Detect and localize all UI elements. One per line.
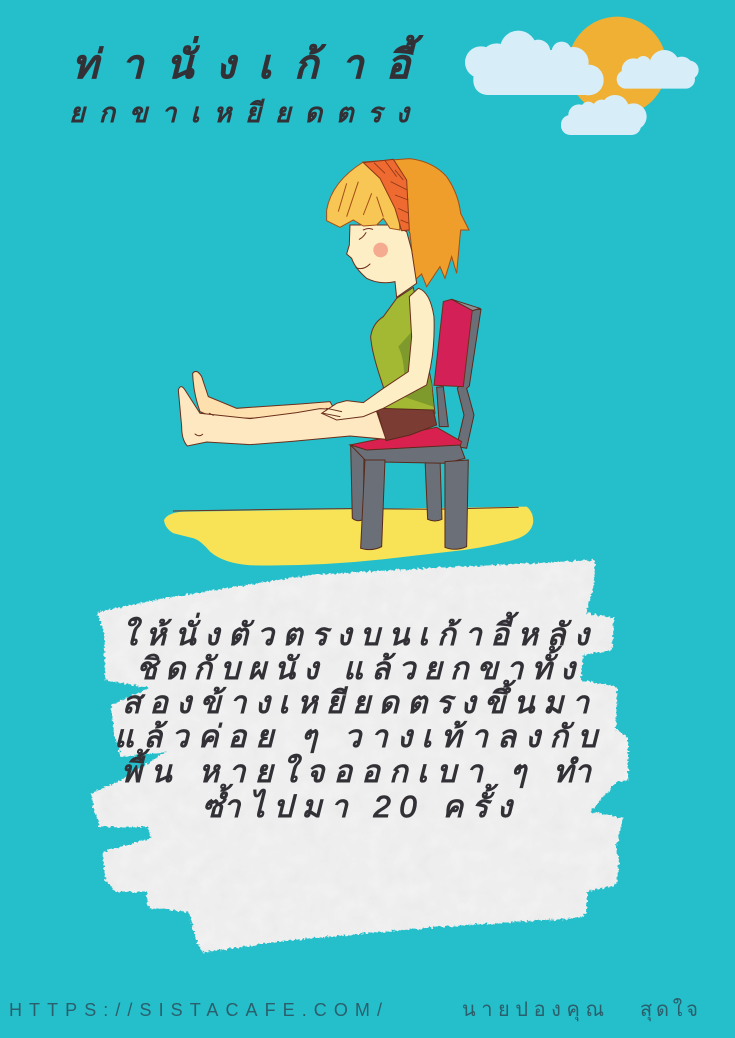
torso and top: [371, 287, 435, 413]
headband: [363, 159, 409, 231]
hair back: [363, 159, 469, 287]
icon: small right cloud: [617, 50, 699, 89]
title: ท่านั่งเก้าอี้: [72, 35, 422, 87]
icon: sun and clouds: [465, 17, 699, 135]
shorts: [377, 408, 437, 441]
illustration: woman seated on chair with legs raised: [164, 159, 533, 565]
body text: สองข้างเหยียดตรงขึ้นมา: [122, 680, 591, 720]
body text: พื้น หายใจออกเบา ๆ ทำ: [121, 749, 593, 789]
ground: [164, 507, 533, 565]
hair fringe: [327, 162, 400, 230]
author name: นายปองคุณ: [462, 999, 604, 1022]
body text: ซ้ำไปมา 20 ครั้ง: [202, 784, 514, 824]
title: [69, 35, 422, 128]
author surname: สุดใจ: [640, 998, 698, 1022]
website url: HTTPS://SISTACAFE.COM/: [9, 1000, 382, 1020]
far leg: [193, 371, 337, 418]
subtitle: ยกขาเหยียดตรง: [69, 98, 411, 128]
arm and hand: [322, 288, 434, 420]
chair: [350, 299, 481, 550]
icon: large cloud: [465, 31, 604, 95]
eye, brow and smile: [356, 228, 373, 269]
body text: แล้วค่อย ๆ วางเท้าลงกับ: [114, 719, 599, 754]
near leg: [178, 387, 386, 446]
footer: [9, 998, 698, 1022]
icon: lower cloud: [561, 95, 647, 135]
body text: ให้นั่งตัวตรงบนเก้าอี้หลัง: [122, 612, 591, 652]
ankle marks: [195, 413, 213, 436]
panel: torn white brush paper: [91, 560, 628, 952]
neck and face: [347, 225, 417, 297]
icon: sun: [568, 17, 667, 115]
body text: [114, 612, 599, 824]
body text: ชิดกับผนัง แล้วยกขาทั้ง: [136, 646, 577, 686]
cheek: [373, 243, 388, 257]
